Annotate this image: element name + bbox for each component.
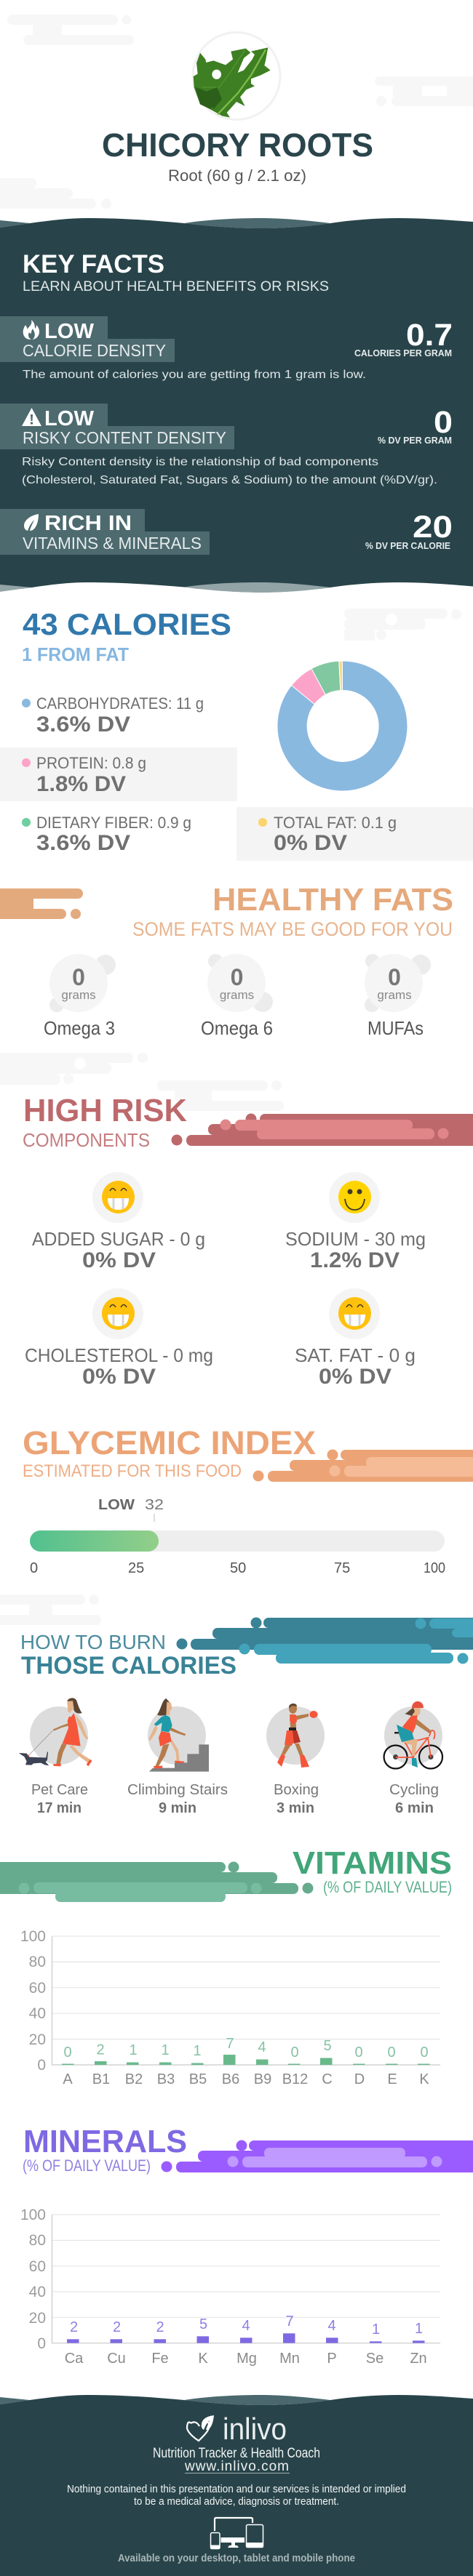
item: cholesterol: 0% DV <box>82 1365 156 1389</box>
chart: vitamins bar chart: 0 <box>290 2045 299 2061</box>
logo: inlivo <box>187 2412 287 2446</box>
legend: total fat: 0% DV <box>274 831 347 855</box>
chart: minerals bar chart: Ca <box>65 2351 84 2367</box>
chart: minerals bar chart: 2 <box>113 2319 121 2335</box>
calories heading: 43 CALORIES <box>23 607 231 641</box>
icon: cyclist <box>384 1701 442 1768</box>
logo: inlivo: inlivo <box>223 2412 287 2446</box>
item: saturated fat <box>295 1288 416 1389</box>
item: sodium <box>285 1172 426 1272</box>
background clouds: high risk <box>0 1053 284 1111</box>
subheading: (% OF DAILY VALUE) <box>23 2156 151 2175</box>
chart: minerals bar chart: 40 <box>29 2284 46 2300</box>
chart: vitamins bar chart: 60 <box>29 1980 46 1997</box>
gauge value <box>98 1497 164 1522</box>
panel: key facts <box>0 218 473 603</box>
gauge scale: 25 <box>128 1560 144 1576</box>
decoration: orange bars <box>253 1450 473 1482</box>
chart: minerals bar chart: P <box>327 2351 337 2367</box>
panel: calories <box>0 607 473 861</box>
stat: omega 6 <box>201 954 273 1039</box>
fact: calorie density: 0.7 <box>406 318 453 353</box>
legend: protein: 1.8% DV <box>36 772 126 796</box>
item: sodium: SODIUM - 30 mg <box>285 1228 426 1250</box>
band: total fat <box>236 807 473 861</box>
disclaimer <box>67 2483 406 2508</box>
panel: footer <box>0 2395 473 2576</box>
chart: vitamins bar chart: 0 <box>63 2045 72 2061</box>
chart: minerals bar chart: 7 <box>285 2314 294 2330</box>
chart: vitamins bar chart: 0 <box>37 2057 46 2074</box>
item: added sugar: ADDED SUGAR - 0 g <box>32 1228 205 1250</box>
chart: vitamins bar chart: 1 <box>193 2043 202 2059</box>
chart: minerals bar chart: K <box>198 2351 208 2367</box>
tagline: Nutrition Tracker & Health Coach <box>153 2446 320 2461</box>
decoration: green bars <box>0 1861 313 1902</box>
bottom wave of key facts <box>0 582 473 603</box>
item: added sugar: 0% DV <box>82 1248 156 1272</box>
heading line one: HOW TO BURN <box>20 1631 166 1653</box>
gauge scale: 50 <box>230 1560 246 1576</box>
chart: minerals bar chart: 100 <box>20 2207 46 2223</box>
chart: vitamins bar chart: 20 <box>29 2031 46 2048</box>
chart: minerals bar chart: 60 <box>29 2258 46 2275</box>
icon: grinning face <box>338 1297 371 1330</box>
chart: minerals bar chart: 4 <box>242 2318 250 2334</box>
legend: carbohydrates: CARBOHYDRATES: 11 g <box>36 694 204 713</box>
chart: vitamins bar chart: B6 <box>222 2071 239 2087</box>
decoration: red bars <box>172 1114 473 1146</box>
chart: minerals bar chart: Se <box>366 2351 383 2367</box>
title: CHICORY ROOTS <box>102 127 373 164</box>
disclaimer: to be a medical advice, diagnosis or treatment. <box>134 2495 339 2508</box>
chart: minerals bar chart: 5 <box>199 2316 207 2332</box>
chart: vitamins bar chart: D <box>354 2071 365 2087</box>
chart: vitamins bar chart: 2 <box>96 2042 105 2058</box>
chart: minerals bar chart: Mn <box>279 2351 300 2367</box>
icon: devices <box>210 2518 263 2549</box>
gauge scale: 75 <box>334 1560 350 1576</box>
fact: risky content density: RISKY CONTENT DENSITY <box>23 428 226 447</box>
icon: warning triangle <box>22 408 41 426</box>
fact: risky content density: Risky Content density is the relationship of bad components <box>22 456 378 468</box>
chart: minerals bar chart: Fe <box>151 2351 169 2367</box>
activity: climbing stairs <box>127 1698 228 1816</box>
icon: grinning face <box>102 1181 135 1213</box>
gauge bar <box>30 1530 445 1552</box>
stat: omega 3 <box>44 954 116 1039</box>
chart: minerals bar chart: 0 <box>37 2335 46 2352</box>
activity: cycling: 6 min <box>395 1800 434 1816</box>
icon: smiling face <box>338 1181 371 1213</box>
chart: minerals bar chart: 1 <box>372 2322 380 2338</box>
decoration: teal bars <box>176 1617 473 1664</box>
fact: rich in vitamins and minerals: 20 <box>413 510 453 545</box>
stat: omega 6: 0 <box>231 964 243 990</box>
fact: rich in vitamins and minerals: % DV PER CALORIE <box>365 540 450 551</box>
availability note: Available on your desktop, tablet and mobile phone <box>118 2552 355 2564</box>
website link: www.inlivo.com <box>184 2459 289 2474</box>
stat: omega 3: Omega 3 <box>44 1017 115 1039</box>
legend: carbohydrates <box>22 694 204 737</box>
icon: grinning face <box>102 1297 135 1330</box>
fact: calorie density <box>0 316 453 381</box>
chart: vitamins bar chart: 5 <box>323 2038 332 2054</box>
key facts subheading: LEARN ABOUT HEALTH BENEFITS OR RISKS <box>23 279 329 294</box>
chart: minerals bar chart: 20 <box>29 2310 46 2327</box>
food image: chicory leaf in circle <box>193 32 280 119</box>
chart: vitamins bar chart: 100 <box>20 1928 46 1945</box>
section: healthy fats <box>0 882 453 1039</box>
activity: pet care <box>19 1698 92 1816</box>
legend: dietary fiber: 3.6% DV <box>36 831 130 855</box>
icon: boxer <box>277 1704 317 1768</box>
section: vitamins <box>0 1845 452 2087</box>
subheading: COMPONENTS <box>23 1129 150 1151</box>
icon: flame <box>23 320 39 340</box>
activity: climbing stairs: 9 min <box>159 1800 196 1816</box>
chart: vitamins bar chart: B12 <box>282 2071 308 2087</box>
background cloud: top right <box>375 76 473 106</box>
chart: vitamins bar chart: E <box>387 2071 397 2087</box>
chart: vitamins bar chart: B5 <box>189 2071 207 2087</box>
background cloud: top left <box>7 15 134 45</box>
stat: mufas: grams <box>377 988 412 1002</box>
fact: risky content density: LOW <box>44 407 95 430</box>
calories from fat: 1 FROM FAT <box>22 643 129 665</box>
heading: HEALTHY FATS <box>212 882 453 918</box>
chart: vitamins bar chart: 1 <box>161 2042 170 2058</box>
chart: minerals bar chart: Mg <box>236 2351 257 2367</box>
activity: pet care: Pet Care <box>31 1782 88 1798</box>
chart: vitamins bar chart: 0 <box>420 2045 429 2061</box>
item: cholesterol <box>25 1288 213 1389</box>
legend: total fat: TOTAL FAT: 0.1 g <box>274 814 397 832</box>
chart: vitamins bar chart: K <box>419 2071 429 2087</box>
decoration: purple bars <box>162 2140 473 2172</box>
chart: vitamins bar chart <box>20 1928 440 2087</box>
activity: boxing <box>266 1704 325 1816</box>
gauge scale <box>30 1560 445 1576</box>
background cloud: burn calories <box>0 1594 101 1625</box>
item: saturated fat: SAT. FAT - 0 g <box>295 1344 416 1366</box>
chart: vitamins bar chart: A <box>63 2071 73 2087</box>
activity: climbing stairs: Climbing Stairs <box>127 1782 228 1798</box>
chart: vitamins bar chart: 7 <box>226 2036 234 2052</box>
item: saturated fat: 0% DV <box>319 1365 391 1389</box>
heading: VITAMINS <box>293 1845 452 1881</box>
item: sodium: 1.2% DV <box>310 1248 400 1272</box>
fact: rich in vitamins and minerals <box>0 509 453 555</box>
chart: minerals bar chart: 1 <box>415 2321 423 2337</box>
chart: vitamins bar chart: B2 <box>125 2071 143 2087</box>
stat: omega 6: Omega 6 <box>201 1017 273 1039</box>
chart: minerals bar chart: Cu <box>107 2351 126 2367</box>
gauge value: 32 <box>145 1497 164 1513</box>
legend: dietary fiber: DIETARY FIBER: 0.9 g <box>36 814 191 832</box>
legend: dietary fiber <box>22 814 191 855</box>
fact: risky content density: 0 <box>434 405 453 440</box>
gauge scale: 100 <box>424 1560 445 1576</box>
legend: protein: PROTEIN: 0.8 g <box>36 754 146 772</box>
band: protein <box>0 747 237 801</box>
chart: minerals bar chart <box>20 2207 440 2367</box>
chart: vitamins bar chart: 0 <box>354 2045 363 2061</box>
heading line two: THOSE CALORIES <box>21 1652 236 1680</box>
fact: risky content density <box>0 404 453 486</box>
activity: cycling <box>384 1701 442 1816</box>
icon: woman climbing stairs <box>148 1698 209 1772</box>
subheading: ESTIMATED FOR THIS FOOD <box>23 1461 242 1481</box>
activity: boxing: Boxing <box>274 1782 319 1798</box>
decoration: orange bars <box>0 888 83 919</box>
section: high risk components <box>23 1093 473 1389</box>
activity: pet care: 17 min <box>37 1800 82 1816</box>
activity: cycling: Cycling <box>389 1782 439 1798</box>
chart: vitamins bar chart: 1 <box>129 2042 138 2058</box>
section: minerals <box>20 2124 473 2367</box>
fact: risky content density: % DV PER GRAM <box>378 435 452 446</box>
fact: rich in vitamins and minerals: RICH IN <box>44 512 132 535</box>
activity: boxing: 3 min <box>277 1800 314 1816</box>
serving subtitle: Root (60 g / 2.1 oz) <box>168 166 306 185</box>
chart: minerals bar chart: 2 <box>70 2319 78 2335</box>
chart: vitamins bar chart: B9 <box>254 2071 271 2087</box>
heading: MINERALS <box>23 2124 187 2159</box>
chart: macronutrient donut <box>277 661 408 791</box>
key facts heading: KEY FACTS <box>23 250 164 278</box>
chart: vitamins bar chart: B3 <box>157 2071 175 2087</box>
gauge value: LOW <box>98 1497 135 1513</box>
chart: vitamins bar chart: C <box>322 2071 333 2087</box>
chart: vitamins bar chart: 4 <box>258 2039 266 2055</box>
heading: GLYCEMIC INDEX <box>23 1424 316 1461</box>
legend: total fat <box>258 814 397 855</box>
section: how to burn those calories <box>19 1617 473 1816</box>
stat: mufas: MUFAs <box>367 1017 424 1039</box>
chart: vitamins bar chart: 80 <box>29 1954 46 1970</box>
fact: calorie density: CALORIE DENSITY <box>23 341 166 360</box>
stat: omega 3: 0 <box>72 964 85 990</box>
chart: minerals bar chart: 2 <box>156 2319 164 2335</box>
item: cholesterol: CHOLESTEROL - 0 mg <box>25 1344 213 1366</box>
stat: mufas: 0 <box>388 964 401 990</box>
fact: rich in vitamins and minerals: VITAMINS & MINERALS <box>23 534 202 553</box>
fact: calorie density: CALORIES PER GRAM <box>354 348 452 358</box>
icon: woman walking dog <box>19 1698 92 1766</box>
chart: minerals bar chart: Zn <box>410 2351 427 2367</box>
legend: carbohydrates: 3.6% DV <box>36 713 130 737</box>
legend: protein <box>22 754 146 796</box>
stat: omega 3: grams <box>61 988 96 1002</box>
chart: vitamins bar chart: B1 <box>92 2071 110 2087</box>
stat: omega 6: grams <box>220 988 254 1002</box>
chart: minerals bar chart: 80 <box>29 2232 46 2249</box>
gauge scale: 0 <box>30 1560 38 1576</box>
chart: vitamins bar chart: 40 <box>29 2005 46 2022</box>
subheading: SOME FATS MAY BE GOOD FOR YOU <box>132 918 453 940</box>
fact: calorie density: LOW <box>44 320 95 343</box>
fact: risky content density: (Cholesterol, Saturated Fat, Sugars & Sodium) to the amount (%DV/gr). <box>22 474 437 486</box>
stat: mufas <box>365 954 431 1039</box>
chart: minerals bar chart: 4 <box>327 2318 336 2334</box>
background cloud: calories <box>344 609 461 641</box>
icon: leaf <box>24 514 39 531</box>
item: added sugar <box>32 1172 205 1272</box>
disclaimer: Nothing contained in this presentation and our services is intended or implied <box>67 2483 406 2495</box>
background cloud: left of subtitle <box>0 178 111 209</box>
heading: HIGH RISK <box>23 1093 187 1128</box>
fact: calorie density: The amount of calories you are getting from 1 gram is low. <box>23 369 366 381</box>
chart: vitamins bar chart: 0 <box>387 2045 396 2061</box>
section: glycemic index <box>23 1424 473 1576</box>
